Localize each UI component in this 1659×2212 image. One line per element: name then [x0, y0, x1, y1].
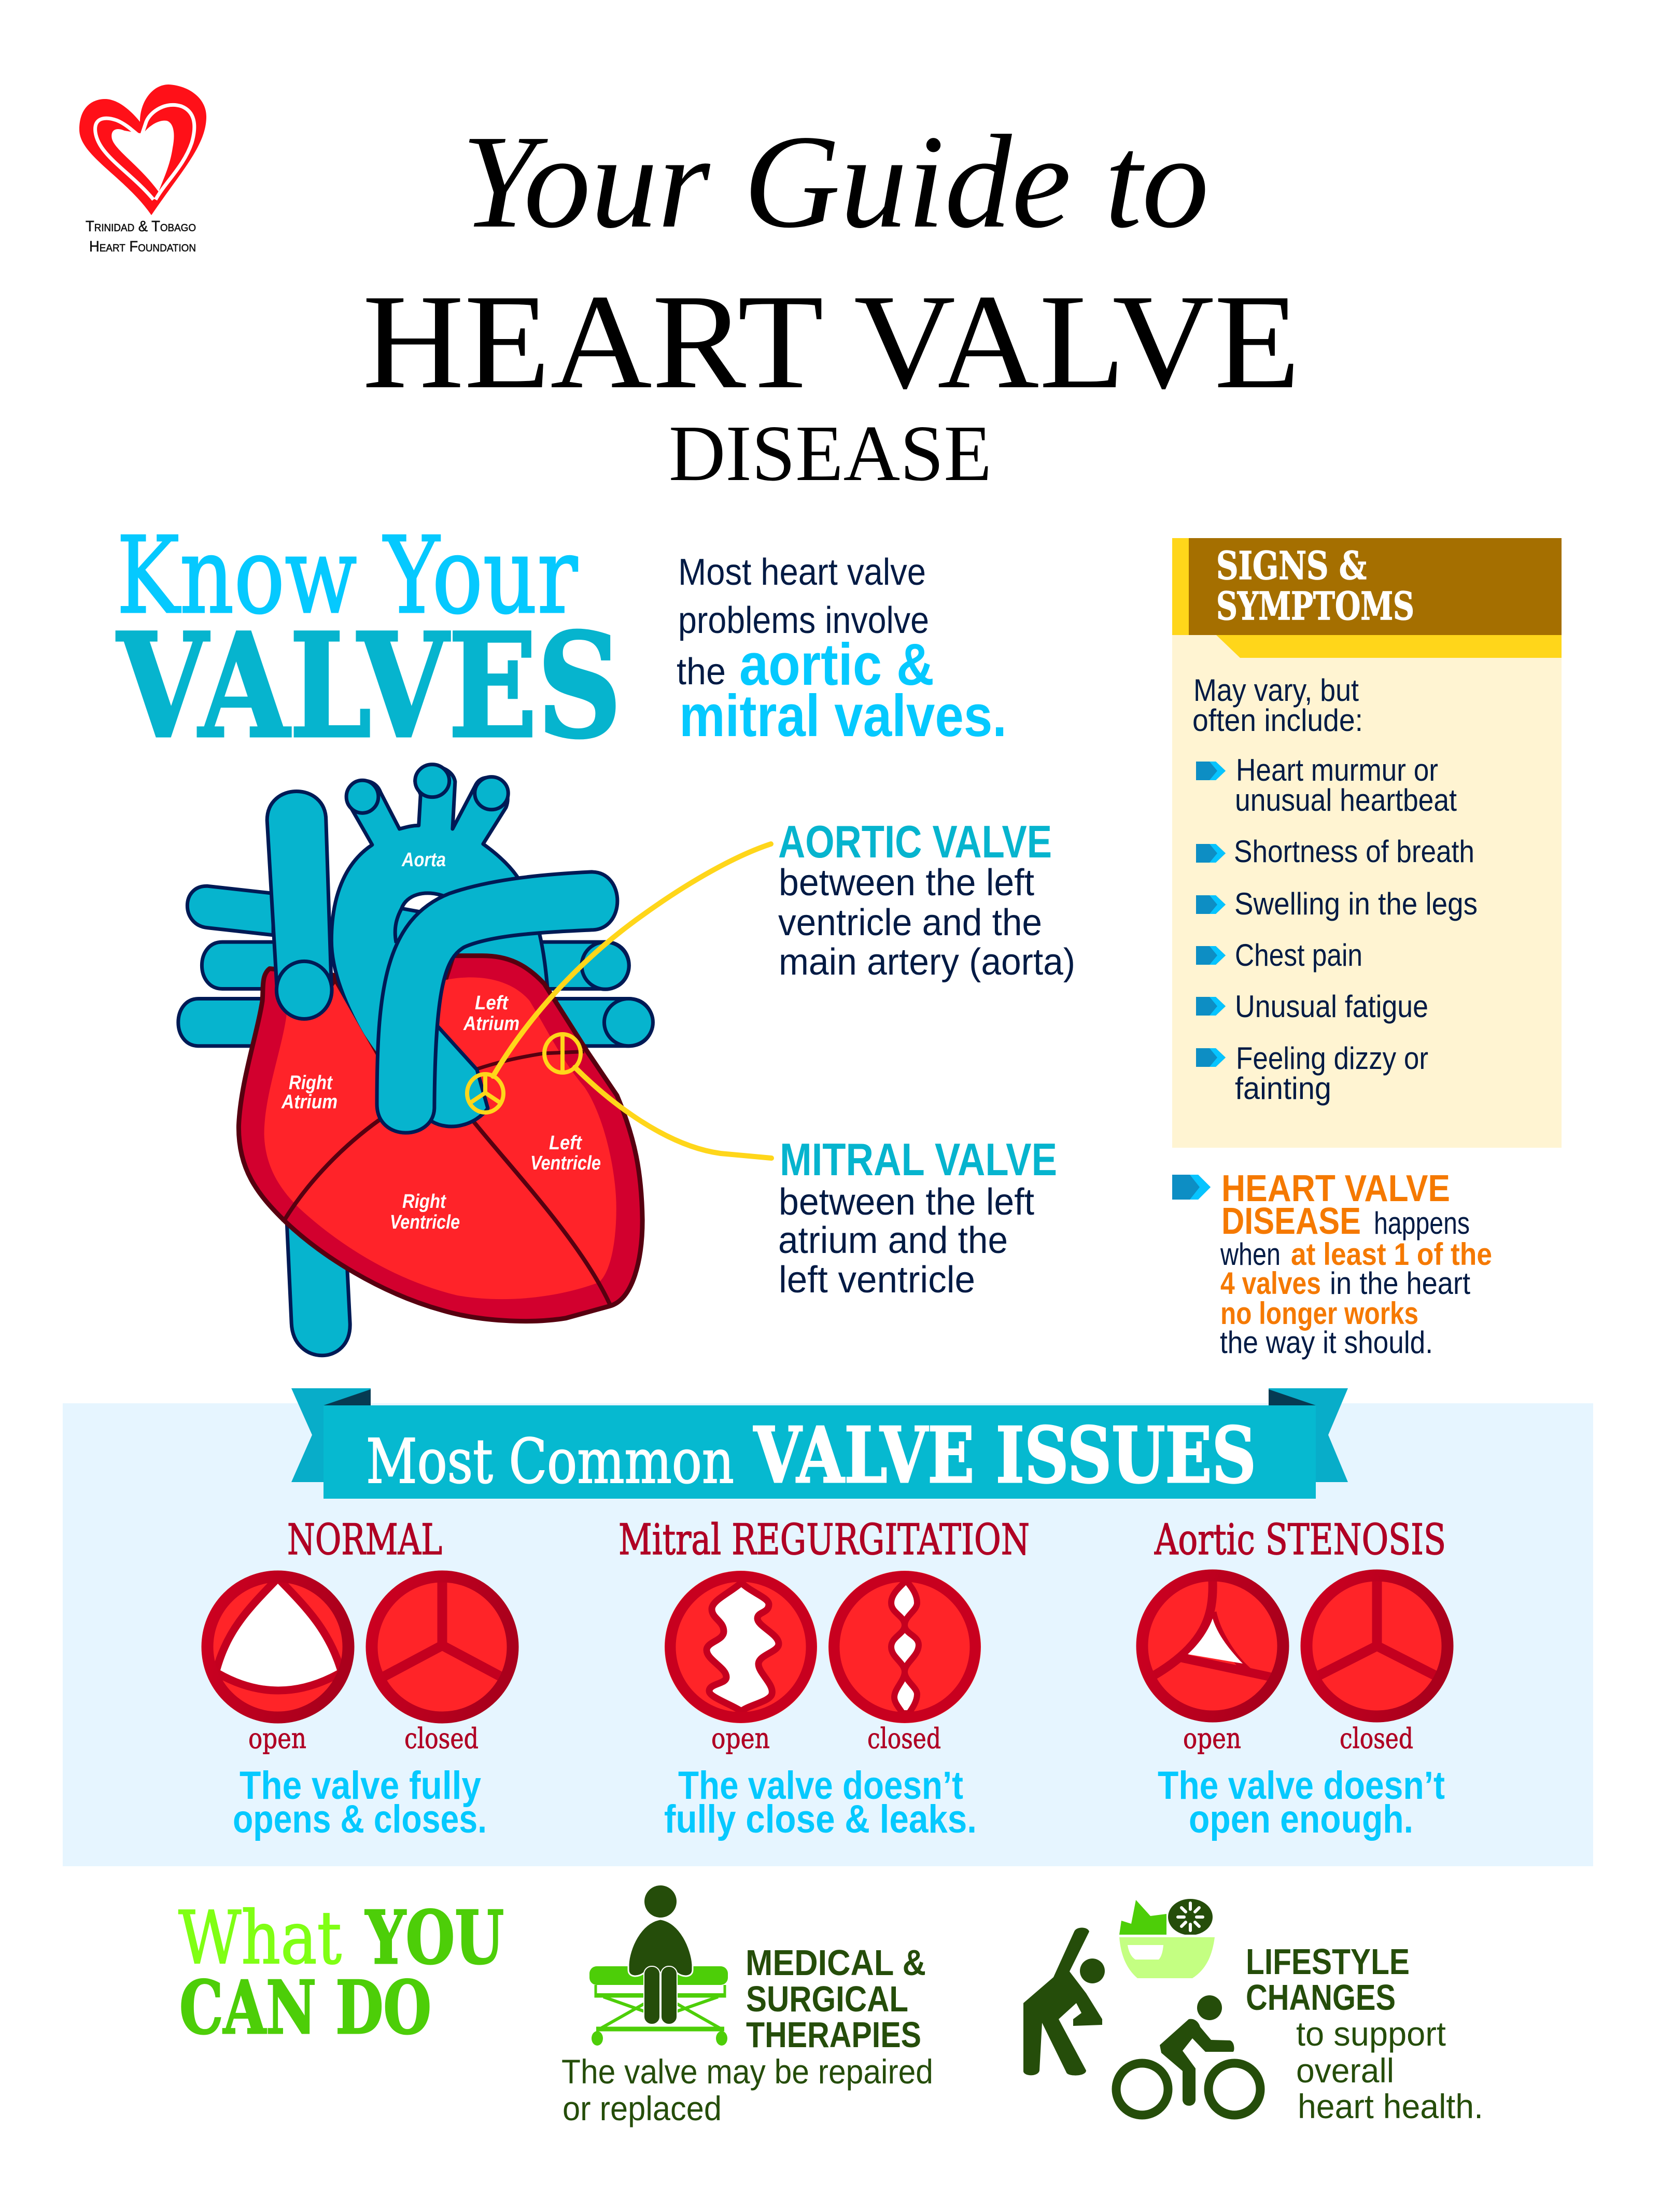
symptom list: Unusual fatigue — [1235, 989, 1428, 1024]
valve: aortic open — [1136, 1570, 1289, 1722]
valve: mitral open — [665, 1571, 817, 1723]
logo: Trinidad & Tobago Heart Foundation — [79, 84, 206, 255]
column: mitral regurgitation: The valve doesn’t — [678, 1764, 963, 1808]
logo: Trinidad & Tobago Heart Foundation: Trinidad & Tobago — [86, 218, 196, 235]
text: medical and surgical therapies: THERAPIES — [746, 2014, 921, 2055]
column: mitral regurgitation — [618, 1516, 1030, 1841]
heart chamber labels: Left — [549, 1132, 582, 1154]
callout: mitral valve — [778, 1134, 1057, 1301]
title: HEART VALVE — [362, 266, 1300, 417]
callout: heart valve disease definition: HEART VALVE — [1221, 1168, 1450, 1209]
mitral valve marker — [544, 1034, 581, 1073]
heading: Know Your Valves: Know Your — [117, 515, 578, 638]
heart chamber labels: Right — [289, 1072, 333, 1094]
column: normal: closed — [404, 1722, 479, 1755]
text: medical and surgical therapies: SURGICAL — [746, 1979, 908, 2019]
superior vena cava — [267, 791, 331, 988]
heading: Know Your Valves — [115, 515, 622, 770]
column: aortic stenosis: closed — [1340, 1722, 1413, 1755]
heart chamber labels: Right — [402, 1191, 446, 1213]
column: aortic stenosis: open — [1183, 1722, 1241, 1755]
heart chamber labels: Left — [475, 992, 509, 1014]
icon: patient on treatment table — [589, 1885, 728, 2046]
heart body bright inner — [264, 977, 616, 1299]
yellow connector: mitral valve — [575, 1067, 771, 1158]
intro text: problems involve — [678, 600, 929, 641]
text: lifestyle changes: heart health. — [1298, 2087, 1483, 2125]
panel intro text: May vary, but — [1193, 673, 1359, 708]
heading: what you can do — [178, 1895, 504, 2051]
callout: heart valve disease definition: when — [1220, 1237, 1281, 1272]
callout: aortic valve — [778, 816, 1075, 983]
aortic root bulb — [413, 1026, 488, 1126]
pulmonary artery — [377, 872, 617, 1133]
symptom list: unusual heartbeat — [1235, 783, 1457, 818]
heart chamber labels — [281, 849, 601, 1233]
text: lifestyle changes: LIFESTYLE — [1246, 1941, 1410, 1982]
column: mitral regurgitation: Mitral REGURGITATION — [618, 1516, 1030, 1565]
text: lifestyle changes: overall — [1296, 2051, 1394, 2090]
title — [362, 107, 1300, 498]
title: Your Guide to — [461, 107, 1209, 256]
column: mitral regurgitation: closed — [867, 1722, 941, 1755]
title: DISEASE — [669, 410, 992, 498]
intro text: the — [677, 651, 726, 693]
intro text: Most heart valve — [678, 552, 926, 593]
intro text: mitral valves. — [679, 683, 1007, 749]
symptom list: Swelling in the legs — [1234, 886, 1478, 921]
heart diagram — [178, 765, 771, 1356]
callout: mitral valve: atrium and the — [778, 1220, 1008, 1261]
text: lifestyle changes — [1246, 1941, 1483, 2125]
heading: what you can do: CAN DO — [179, 1965, 431, 2051]
logo: Trinidad & Tobago Heart Foundation: Heart Foundation — [89, 238, 196, 255]
valve: mitral closed — [828, 1571, 981, 1723]
column: normal: The valve fully — [240, 1764, 481, 1808]
callout: heart valve disease definition: at least 1 of the — [1291, 1237, 1492, 1272]
symptom list: fainting — [1235, 1071, 1331, 1106]
text: medical and surgical therapies: The valve may be repaired — [561, 2052, 933, 2091]
text: medical and surgical therapies: or replaced — [563, 2089, 722, 2128]
column: aortic stenosis: The valve doesn’t — [1158, 1764, 1445, 1808]
symptom list: Shortness of breath — [1234, 834, 1474, 869]
heart chamber labels: Atrium — [463, 1013, 519, 1035]
ribbon banner: Most Common — [366, 1426, 734, 1497]
column: aortic stenosis: open enough. — [1189, 1797, 1413, 1841]
column: normal — [202, 1516, 518, 1841]
intro text: aortic & — [739, 632, 934, 698]
callout: heart valve disease definition: no longer works — [1220, 1296, 1418, 1331]
column: normal: open — [248, 1722, 306, 1755]
panel heading: SIGNS & — [1216, 544, 1367, 588]
text: lifestyle changes: CHANGES — [1246, 1977, 1396, 2018]
panel: most common valve issues — [63, 1388, 1593, 1866]
yellow connector: aortic valve — [493, 844, 771, 1076]
callout: heart valve disease definition: 4 valves — [1220, 1266, 1321, 1301]
heart body rim — [238, 956, 642, 1321]
callout: aortic valve: between the left — [779, 862, 1034, 904]
callout: mitral valve: between the left — [779, 1181, 1034, 1223]
heart chamber labels: Aorta — [401, 849, 446, 871]
heart chamber labels: Ventricle — [530, 1152, 601, 1174]
panel heading: SYMPTOMS — [1216, 584, 1414, 629]
column: normal: opens & closes. — [233, 1797, 487, 1841]
symptom list — [1234, 753, 1478, 1106]
column: aortic stenosis: Aortic STENOSIS — [1154, 1516, 1446, 1565]
ribbon banner — [291, 1388, 1348, 1500]
callout: aortic valve: AORTIC VALVE — [778, 816, 1052, 867]
heart chamber divider lines — [283, 1119, 381, 1222]
text: lifestyle changes: to support — [1296, 2014, 1446, 2053]
list bullet arrows — [1196, 762, 1226, 1067]
symptom list: Feeling dizzy or — [1236, 1041, 1428, 1076]
left pulmonary veins — [178, 886, 279, 1046]
right pulmonary veins — [530, 942, 653, 1046]
callout: mitral valve: left ventricle — [779, 1259, 975, 1301]
aorta — [331, 766, 548, 1125]
panel intro text: often include: — [1192, 703, 1363, 738]
heading: what you can do: YOU — [364, 1895, 504, 1981]
callout: heart valve disease definition: happens — [1374, 1206, 1470, 1241]
column: aortic stenosis — [1136, 1516, 1453, 1841]
callout: mitral valve: MITRAL VALVE — [780, 1134, 1057, 1185]
callout: heart valve disease definition: in the heart — [1330, 1266, 1470, 1301]
ribbon banner: VALVE ISSUES — [753, 1410, 1256, 1500]
panel: signs and symptoms — [1172, 538, 1562, 1148]
callout: aortic valve: main artery (aorta) — [779, 941, 1075, 983]
panel heading — [1216, 544, 1414, 629]
callout: heart valve disease definition: DISEASE — [1221, 1201, 1361, 1242]
valve: aortic closed — [1301, 1570, 1453, 1722]
heading: Know Your Valves: VALVES — [115, 602, 622, 770]
column: mitral regurgitation: fully close & leaks. — [664, 1797, 977, 1841]
icon: stretching person — [1023, 1927, 1105, 2076]
column: normal: NORMAL — [287, 1516, 442, 1565]
callout: heart valve disease definition — [1172, 1168, 1492, 1360]
valve: normal open — [202, 1571, 354, 1723]
heading: what you can do: What — [178, 1896, 342, 1981]
heart chamber labels: Ventricle — [390, 1211, 460, 1233]
valve: normal closed — [366, 1571, 518, 1723]
symptom list: Chest pain — [1235, 938, 1362, 973]
column: mitral regurgitation: open — [711, 1722, 770, 1755]
icon: salad bowl — [1119, 1899, 1216, 1978]
intro text — [677, 552, 1007, 749]
text: medical and surgical therapies — [561, 1942, 933, 2128]
callout: aortic valve: ventricle and the — [778, 902, 1042, 943]
text: medical and surgical therapies: MEDICAL & — [746, 1942, 926, 1983]
inferior vena cava — [287, 1220, 350, 1356]
aortic valve marker — [467, 1074, 503, 1112]
icon: cyclist — [1116, 1995, 1260, 2115]
callout: heart valve disease definition: the way it should. — [1220, 1325, 1433, 1360]
icon: arrow — [1172, 1175, 1211, 1200]
heart chamber labels: Atrium — [281, 1091, 338, 1113]
symptom list: Heart murmur or — [1236, 753, 1438, 787]
panel intro text — [1192, 673, 1363, 738]
